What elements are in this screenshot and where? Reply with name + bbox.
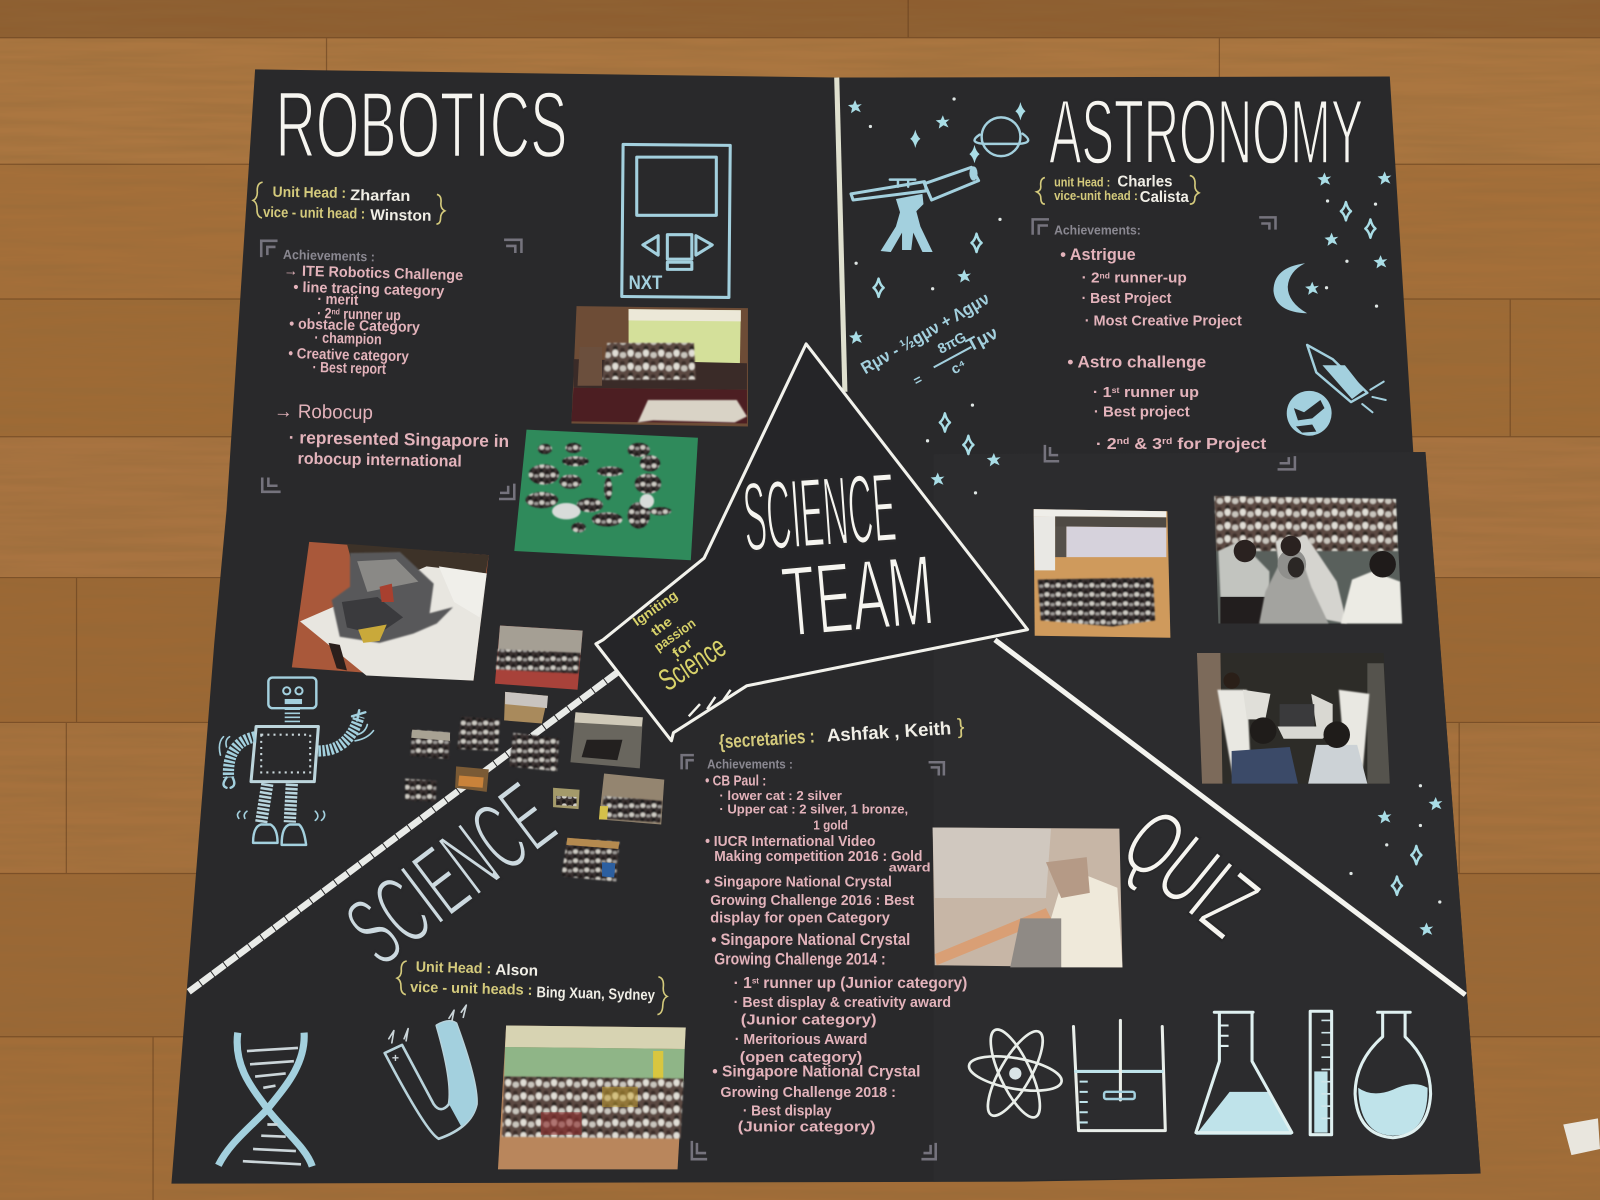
icon: measuring cylinder xyxy=(1310,1011,1332,1135)
achievements list: 1 gold xyxy=(813,818,848,833)
achievements list: runner up xyxy=(1120,385,1199,401)
achievements list: Growing Challenge 2016 : Best xyxy=(710,893,914,909)
achievements list: • IUCR International Video xyxy=(705,834,876,850)
achievements list: · Best report xyxy=(312,360,386,378)
unit heads block: Winston xyxy=(370,207,432,225)
achievements list: Growing Challenge 2014 : xyxy=(714,950,886,968)
achievements list: nd xyxy=(1100,272,1110,281)
secretaries line: {secretaries : xyxy=(718,726,815,753)
rope divider: vertical xyxy=(837,78,845,392)
achievements list: • Astrigue xyxy=(1060,246,1136,264)
achievements list: (Junior category) xyxy=(738,1120,876,1136)
secretaries line xyxy=(718,714,965,753)
tagline: Igniting xyxy=(630,587,680,629)
achievements list: • Singapore National Crystal xyxy=(711,931,910,949)
equation: Tμν xyxy=(962,322,1001,356)
centre flask: science team: SCIENCE xyxy=(740,452,899,572)
icon: atom xyxy=(966,1024,1064,1123)
icon: telescope xyxy=(851,166,979,252)
achievements list xyxy=(1054,223,1267,453)
achievements list: st xyxy=(752,977,759,986)
achievements list: · champion xyxy=(314,330,382,348)
icon: NXT brick: NXT xyxy=(629,272,662,294)
photo: team around table xyxy=(1197,653,1390,784)
small photos collage xyxy=(405,692,664,882)
heading: quiz: QUIZ xyxy=(1103,788,1278,958)
achievements list: • Singapore National Crystal xyxy=(712,1064,920,1081)
unit heads block: Unit Head : xyxy=(272,185,346,202)
tagline: Science xyxy=(653,630,732,698)
achievements list: · lower cat : 2 silver xyxy=(719,788,842,803)
tagline xyxy=(630,587,732,698)
photo: student in lab xyxy=(933,828,1122,967)
achievements list: Achievements : xyxy=(707,756,793,771)
unit heads block: vice - unit head : xyxy=(263,205,365,223)
unit heads block: Calista xyxy=(1140,189,1189,206)
unit heads block: vice - unit heads : xyxy=(410,980,533,999)
robocup text xyxy=(273,400,510,471)
achievements list: · 1 xyxy=(734,975,752,992)
flask graduation ticks xyxy=(689,690,731,716)
rope divider: science diagonal xyxy=(189,672,617,992)
achievements list: • Creative category xyxy=(288,346,410,365)
icon: earth xyxy=(1287,391,1332,436)
achievements list: · 2 xyxy=(1096,436,1114,453)
centre flask: science team xyxy=(596,344,1028,741)
achievements list: Growing Challenge 2018 : xyxy=(720,1085,896,1101)
achievements list: (open category) xyxy=(740,1050,862,1066)
icon: conical flask xyxy=(1196,1012,1292,1135)
photo: hall group xyxy=(495,626,583,690)
achievements list: for Project xyxy=(1172,436,1267,453)
decorative stars xyxy=(1349,784,1442,936)
achievements list: Achievements : xyxy=(283,247,375,264)
photo: hall group xyxy=(1034,509,1170,638)
achievements list: · 1 xyxy=(1093,385,1110,401)
unit heads block: Unit Head : xyxy=(416,959,491,977)
achievements list: • obstacle Category xyxy=(289,316,421,336)
achievements list: · Best Project xyxy=(1082,291,1171,307)
unit heads block: unit Head : xyxy=(1054,175,1110,190)
achievements list: runner up xyxy=(340,307,401,324)
title: science team: TEAM xyxy=(778,534,938,659)
robocup text: robocup international xyxy=(297,450,462,471)
achievements list: nd xyxy=(1117,436,1129,446)
heading: robotics: ROBOTICS xyxy=(276,72,567,177)
unit heads block xyxy=(1037,174,1199,206)
equation: 8πG xyxy=(935,329,969,358)
achievements brackets xyxy=(261,240,521,499)
achievements list: • line tracing category xyxy=(293,280,445,300)
equation: c⁴ xyxy=(948,357,969,378)
achievements list: award xyxy=(889,860,931,874)
title: science team xyxy=(740,452,938,659)
icon: round-bottom flask xyxy=(1355,1012,1431,1138)
photo: robot on table xyxy=(292,542,489,681)
icon: NXT brick xyxy=(622,144,730,297)
achievements list: • Singapore National Crystal xyxy=(705,875,892,891)
achievements list: runner-up xyxy=(1110,271,1187,287)
achievements list: • CB Paul : xyxy=(705,774,766,790)
achievements list xyxy=(280,247,464,380)
achievements list: · 2 xyxy=(317,306,335,322)
achievements list: · Meritorious Award xyxy=(735,1032,867,1048)
achievements list: rd xyxy=(1162,436,1172,446)
icon: moon xyxy=(1273,263,1307,313)
icon: beaker xyxy=(1073,1020,1165,1131)
achievements list: · Best display & creativity award xyxy=(734,995,951,1011)
unit heads block: Zharfan xyxy=(350,187,410,205)
achievements list: Making competition 2016 : Gold xyxy=(714,849,922,865)
photo: lecture theatre xyxy=(1214,496,1402,623)
rope divider: quiz diagonal xyxy=(995,640,1465,995)
achievements list: • Astro challenge xyxy=(1067,352,1206,371)
achievements list: display for open Category xyxy=(710,910,891,926)
achievements list: Achievements: xyxy=(1054,223,1141,238)
achievements list: nd xyxy=(331,307,340,317)
achievements list: · 2 xyxy=(1082,271,1099,287)
photo: team on stage xyxy=(571,306,748,427)
unit heads block: Charles xyxy=(1117,174,1172,191)
decorative stars xyxy=(848,97,1391,494)
achievements brackets xyxy=(682,755,944,1159)
unit heads block: Bing Xuan, Sydney xyxy=(536,984,655,1004)
achievements list: · Best project xyxy=(1094,404,1190,420)
photo: science group xyxy=(498,1026,686,1169)
icon: planet xyxy=(975,117,1028,156)
unit heads block: vice-unit head : xyxy=(1054,188,1138,203)
panel: quiz xyxy=(933,496,1442,1138)
tagline: passion xyxy=(651,615,698,654)
icon: magnet xyxy=(385,1005,477,1139)
secretaries line: } xyxy=(956,714,965,739)
panel: robotics xyxy=(253,72,748,681)
achievements list: (Junior category) xyxy=(741,1012,877,1028)
tagline: for xyxy=(669,636,695,661)
achievements list: runner up (Junior category) xyxy=(759,975,967,992)
photo: aerial field formation xyxy=(514,430,698,560)
tagline: the xyxy=(648,614,675,639)
poster board xyxy=(171,69,1481,1184)
heading: science: SCIENCE xyxy=(326,761,575,987)
icon: magnet: + xyxy=(392,1051,399,1065)
achievements list xyxy=(705,756,967,1136)
achievements list: · merit xyxy=(317,292,359,309)
achievements list: · Most Creative Project xyxy=(1085,314,1242,330)
achievements brackets xyxy=(1033,217,1295,469)
panel: science xyxy=(218,626,967,1169)
unit heads block xyxy=(253,182,445,225)
robocup text: → Robocup xyxy=(274,400,373,424)
unit heads block: Alson xyxy=(495,962,538,980)
achievements list: · Upper cat : 2 silver, 1 bronze, xyxy=(719,801,908,816)
equation: Rμν - ½gμν + Λgμν xyxy=(857,288,993,378)
icon: robot xyxy=(219,678,373,845)
equation: = xyxy=(911,371,925,388)
unit heads block xyxy=(396,959,668,1015)
icon: rocket xyxy=(1307,345,1386,412)
panel: astronomy xyxy=(848,81,1391,494)
achievements list: → ITE Robotics Challenge xyxy=(283,263,463,284)
robocup text: · represented Singapore in xyxy=(289,427,509,451)
icon: dna xyxy=(218,1033,312,1166)
secretaries line: Ashfak , Keith xyxy=(826,717,952,746)
achievements list: st xyxy=(1112,386,1120,395)
achievements list: & 3 xyxy=(1129,436,1162,453)
achievements list: · Best display xyxy=(743,1103,832,1119)
